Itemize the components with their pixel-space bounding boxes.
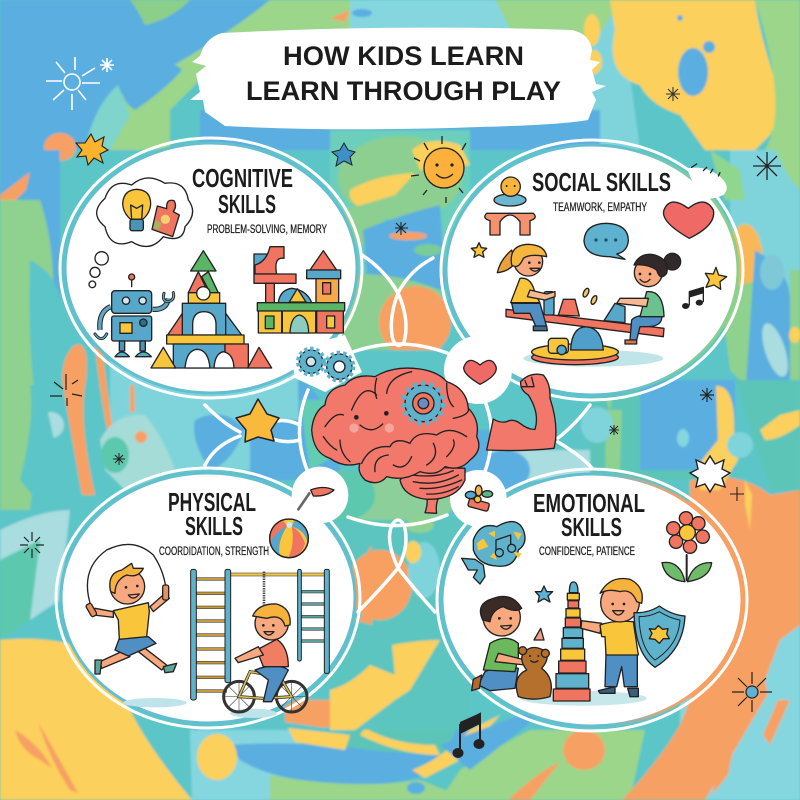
icon: gears — [298, 349, 353, 381]
central brain with muscle arm and gears — [298, 349, 556, 513]
panel: cognitive skills — [60, 138, 362, 398]
bottom right orange — [622, 477, 800, 800]
central — [300, 350, 490, 530]
white blob: flower link — [450, 470, 507, 527]
left column — [44, 133, 76, 161]
icon: blue star — [535, 586, 553, 602]
icon: sun — [411, 136, 466, 203]
icon: yellow star — [236, 399, 279, 442]
heading: cognitive skills — [192, 163, 293, 219]
text: confidence, patience: CONFIDENCE, PATIENCE — [539, 546, 635, 558]
icon: white sparkle — [46, 57, 114, 110]
panel: social skills — [441, 140, 743, 400]
illustration: active play — [85, 467, 348, 718]
text: teamwork, empathy: TEAMWORK, EMPATHY — [553, 202, 647, 214]
icon: stacking tower — [520, 582, 647, 706]
heading: physical skills — [168, 487, 256, 541]
icon: beach ball — [270, 519, 308, 558]
icon: stars and music note — [471, 243, 727, 309]
icon: dark starburst — [753, 152, 781, 180]
icon: child with hair bun — [617, 253, 681, 344]
text: problem-solving, memory: PROBLEM-SOLVING, MEMORY — [207, 224, 327, 236]
white blob: gears link — [290, 335, 362, 392]
icon: white star — [690, 456, 730, 492]
icon: speech bubble — [584, 223, 628, 259]
text: coordidation, strength: COORDIDATION, STRENGTH — [159, 546, 269, 558]
small motion dashes — [692, 164, 720, 176]
icon: asterisk mid right — [609, 425, 619, 435]
title banner — [190, 28, 606, 129]
icon: asterisk upper mid — [395, 222, 408, 235]
icon: block castle — [254, 247, 345, 333]
illustration: seesaw scene — [449, 164, 727, 400]
icon: seesaw — [506, 287, 664, 367]
panel: emotional skills — [437, 469, 747, 731]
icon: sparkle lower right — [732, 672, 772, 712]
icon: dark cross right — [730, 487, 744, 501]
icon: muscle arm — [487, 374, 556, 451]
icon: cloud with music notes — [473, 522, 525, 566]
icon: music note — [452, 713, 484, 758]
white cloud corner — [687, 168, 727, 199]
heading: cognitive skills: SKILLS — [218, 189, 276, 219]
icon: boy with curly hair and teddy — [472, 596, 551, 699]
heading: emotional skills: EMOTIONAL — [533, 488, 645, 518]
heading: physical skills: PHYSICAL — [168, 487, 256, 517]
icon: thought cloud with bulb and puzzle — [89, 178, 193, 288]
icon: orange burst — [76, 134, 108, 165]
icon: black sparkle left — [50, 374, 82, 406]
icon: jumping boy with rope — [85, 544, 177, 674]
icon: small dark asterisk top right — [666, 87, 680, 101]
icon: ribbon — [462, 558, 485, 584]
heading: physical skills: SKILLS — [185, 511, 243, 541]
white blob: roller link — [292, 467, 348, 523]
white blob: heart link — [444, 336, 512, 404]
illustration: emotional play — [450, 470, 712, 706]
white blob: heart link — [449, 340, 509, 400]
title text: HOW KIDS LEARN — [283, 41, 524, 71]
heading: emotional skills: SKILLS — [561, 512, 622, 542]
icon: toy baby on arch — [485, 177, 535, 235]
title text: LEARN THROUGH PLAY — [246, 76, 561, 106]
heading: social skills: SOCIAL SKILLS — [532, 167, 671, 197]
connecting white rings — [205, 255, 592, 612]
icon: asterisk left — [113, 453, 125, 465]
upper middle — [330, 130, 470, 300]
icon: robot — [95, 274, 174, 357]
icon: block tower — [151, 251, 272, 368]
icon: heart large — [664, 202, 714, 238]
heading: cognitive skills: COGNITIVE — [192, 163, 293, 193]
panel: physical skills — [56, 467, 360, 728]
lower middle — [330, 520, 470, 730]
heading: emotional skills — [533, 488, 645, 542]
icon: dark asterisk right — [700, 388, 714, 402]
icon: boy with shield — [581, 579, 685, 697]
icon: flower — [662, 512, 712, 582]
bottom — [0, 639, 192, 800]
icon: boy on bicycle — [123, 604, 307, 718]
icon: blue star — [332, 143, 355, 166]
icon: girl on seesaw — [497, 244, 555, 331]
illustration: cognitive toys — [89, 178, 345, 368]
right column — [730, 150, 800, 310]
icon: brain — [312, 368, 479, 513]
title text — [246, 41, 561, 106]
icon: black sparkle lower left — [20, 532, 44, 558]
icon: climbing frame — [191, 569, 329, 700]
icon: heart small — [464, 360, 496, 384]
